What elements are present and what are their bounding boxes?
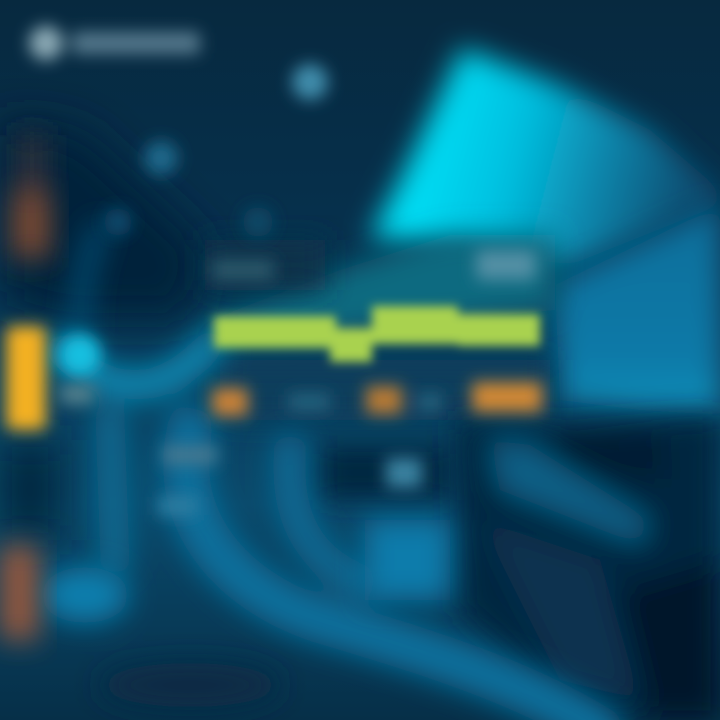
headline labels <box>212 250 536 280</box>
central panel <box>220 360 550 500</box>
logo <box>29 26 200 60</box>
lower left blue swooshes <box>60 230 600 720</box>
decorative dots <box>104 64 328 237</box>
right blue panel <box>555 205 720 415</box>
upper orange side bar <box>12 135 50 258</box>
dark left area <box>0 120 210 540</box>
small text blocks <box>60 384 422 515</box>
lower orange side bar <box>0 545 38 640</box>
green headline <box>214 306 540 362</box>
dark patch around upper labels <box>205 240 325 290</box>
orange figures row <box>212 382 542 416</box>
teal band under headline <box>210 235 555 345</box>
cyan glow spot <box>59 334 101 376</box>
bottom right car silhouette <box>455 415 720 720</box>
bright cyan panel <box>370 48 720 265</box>
yellow side bar <box>6 326 46 430</box>
lower blue block <box>41 520 450 707</box>
